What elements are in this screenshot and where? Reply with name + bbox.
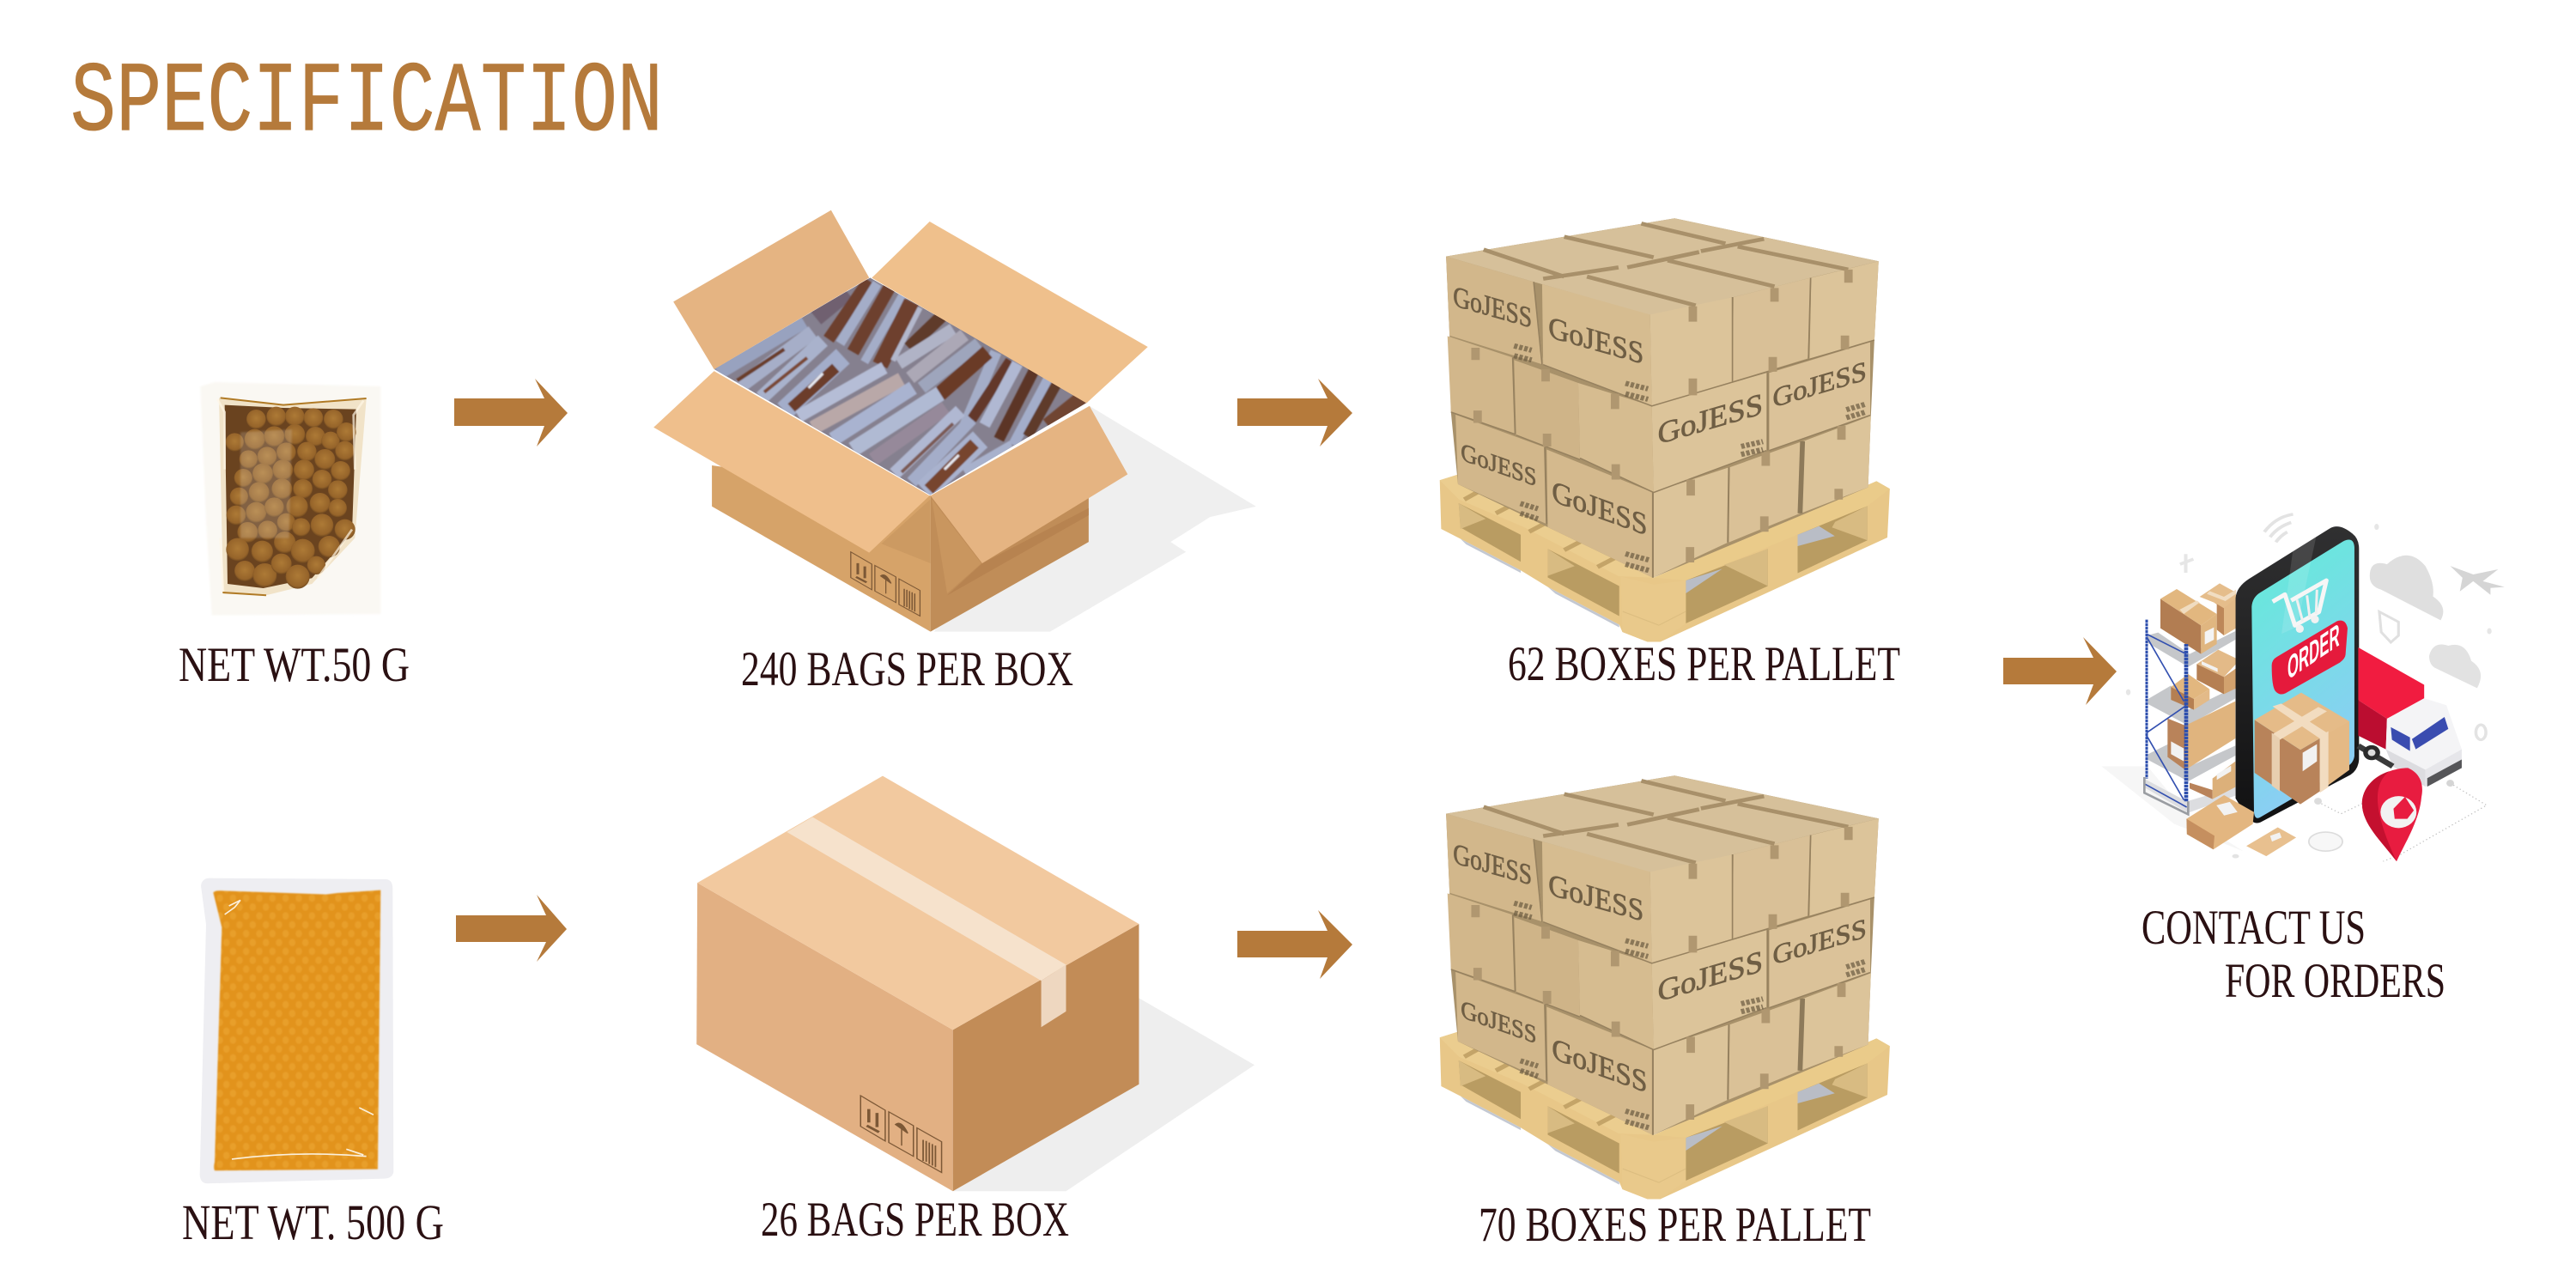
label: contact us for orders bbox=[2142, 901, 2445, 1008]
left front rows bbox=[719, 322, 805, 374]
label: net weight 500 g: NET WT. 500 G bbox=[182, 1194, 444, 1250]
panel: pallet 70 boxes: GoJESS bbox=[1658, 945, 1763, 1009]
panel: pallet 70 boxes: GoJESS bbox=[1552, 1031, 1647, 1100]
arrow: large bag to box bbox=[456, 895, 567, 962]
label: 26 bags per box: 26 BAGS PER BOX bbox=[761, 1193, 1069, 1247]
order button bbox=[2272, 617, 2348, 695]
background icons bbox=[2101, 514, 2505, 861]
label: 240 bags per box: 240 BAGS PER BOX bbox=[741, 642, 1073, 696]
arrow: closed box to pallet bbox=[1237, 910, 1352, 979]
delivery truck bbox=[2358, 647, 2462, 787]
back rows bbox=[816, 292, 848, 318]
panel: large 500 g bag bbox=[200, 878, 393, 1183]
rack frame bbox=[2142, 620, 2150, 779]
box body bbox=[712, 465, 1089, 632]
phone bbox=[2236, 526, 2359, 823]
box flaps bbox=[653, 210, 1148, 563]
small parcels bbox=[2186, 795, 2296, 856]
panel: pallet 70 boxes: GoJESS bbox=[1461, 995, 1536, 1050]
centre rows bbox=[799, 368, 884, 416]
handling icons bbox=[851, 552, 920, 616]
panel: pallet 70 boxes: GoJESS bbox=[1453, 838, 1532, 892]
shopping cart bbox=[2273, 580, 2326, 633]
arrow: open box to pallet bbox=[1237, 379, 1352, 447]
panel: pallet 62 boxes: GoJESS bbox=[1552, 474, 1647, 543]
packing tape bbox=[787, 817, 1066, 1027]
panel: pallet 70 boxes bbox=[1440, 775, 1890, 1199]
box shadow bbox=[934, 406, 1256, 632]
panel: pallet 70 boxes: GoJESS bbox=[1773, 912, 1867, 971]
panel: small 50 g bag bbox=[200, 382, 380, 616]
arrow: pallets to order bbox=[2003, 637, 2117, 705]
panel: pallet 62 boxes: GoJESS bbox=[1658, 387, 1763, 452]
panel: pallet 62 boxes: GoJESS bbox=[1773, 355, 1867, 414]
handling icons bbox=[860, 1096, 942, 1172]
box shadow bbox=[953, 998, 1255, 1191]
front rows bbox=[873, 408, 946, 459]
panel: closed box bbox=[696, 776, 1255, 1191]
label: 62 boxes per pallet: 62 BOXES PER PALLET bbox=[1508, 637, 1900, 691]
warehouse shelves bbox=[2144, 583, 2236, 814]
title: SPECIFICATION bbox=[70, 46, 663, 160]
panel: pallet 70 boxes: GoJESS bbox=[1548, 868, 1643, 928]
panel: pallet 62 boxes: GoJESS bbox=[1548, 311, 1643, 371]
upper centre rows bbox=[899, 329, 953, 363]
label: 70 boxes per pallet: 70 BOXES PER PALLET bbox=[1479, 1198, 1871, 1252]
panel: order illustration bbox=[2101, 514, 2505, 861]
label: contact us for orders: FOR ORDERS bbox=[2225, 954, 2445, 1008]
label: net weight 50 g: NET WT.50 G bbox=[179, 638, 410, 692]
location pin bbox=[2362, 768, 2422, 861]
panel: pallet 62 boxes bbox=[1440, 218, 1890, 641]
arrow: small bag to box bbox=[454, 379, 568, 447]
panel: pallet 62 boxes: GoJESS bbox=[1461, 438, 1536, 493]
box faces bbox=[696, 776, 1139, 1191]
parcel on phone bbox=[2255, 693, 2349, 805]
label: contact us for orders: CONTACT US bbox=[2142, 901, 2366, 955]
bags inside box bbox=[714, 277, 1088, 495]
order button: ORDER bbox=[2287, 617, 2340, 687]
panel: pallet 62 boxes: GoJESS bbox=[1453, 281, 1532, 335]
shelf boxes bbox=[2200, 583, 2236, 610]
panel: open box of bags bbox=[653, 210, 1256, 632]
